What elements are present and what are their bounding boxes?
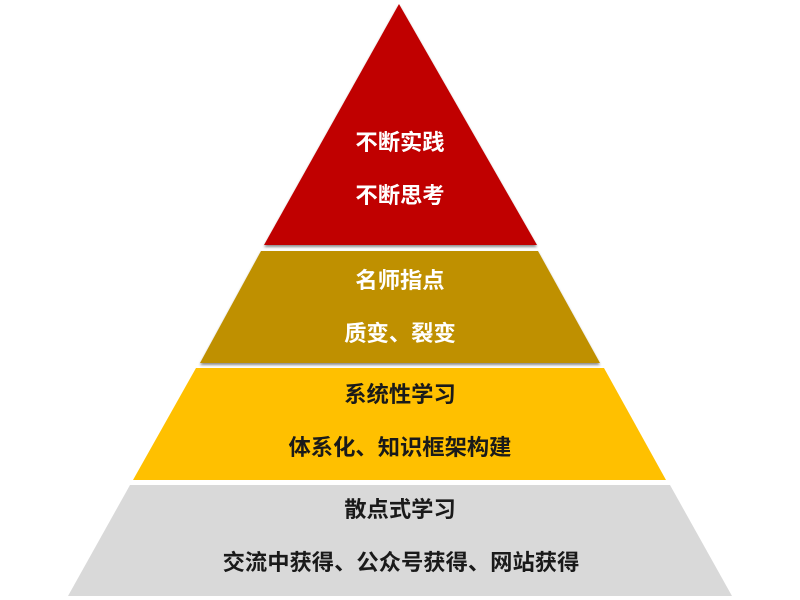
tier 2 text: transformation: 质变、裂变 <box>344 320 456 346</box>
tier 2 text: mentor guidance: 名师指点 <box>355 268 445 293</box>
tier 1 text: practice: 不断实践 <box>355 129 445 155</box>
tier 4 text: sources: 交流中获得、公众号获得、网站获得 <box>223 549 579 575</box>
tier 1: red apex <box>264 4 537 245</box>
tier 3 text: framework building: 体系化、知识框架构建 <box>289 435 511 460</box>
tier 1 text: thinking: 不断思考 <box>355 183 445 208</box>
tier 3: yellow <box>133 368 666 480</box>
tier 4: light grey base <box>68 485 732 596</box>
tier 2: dark gold <box>200 251 600 363</box>
tier 3 text: systematic learning: 系统性学习 <box>344 382 456 407</box>
tier 4 text: scattered learning: 散点式学习 <box>344 497 456 522</box>
